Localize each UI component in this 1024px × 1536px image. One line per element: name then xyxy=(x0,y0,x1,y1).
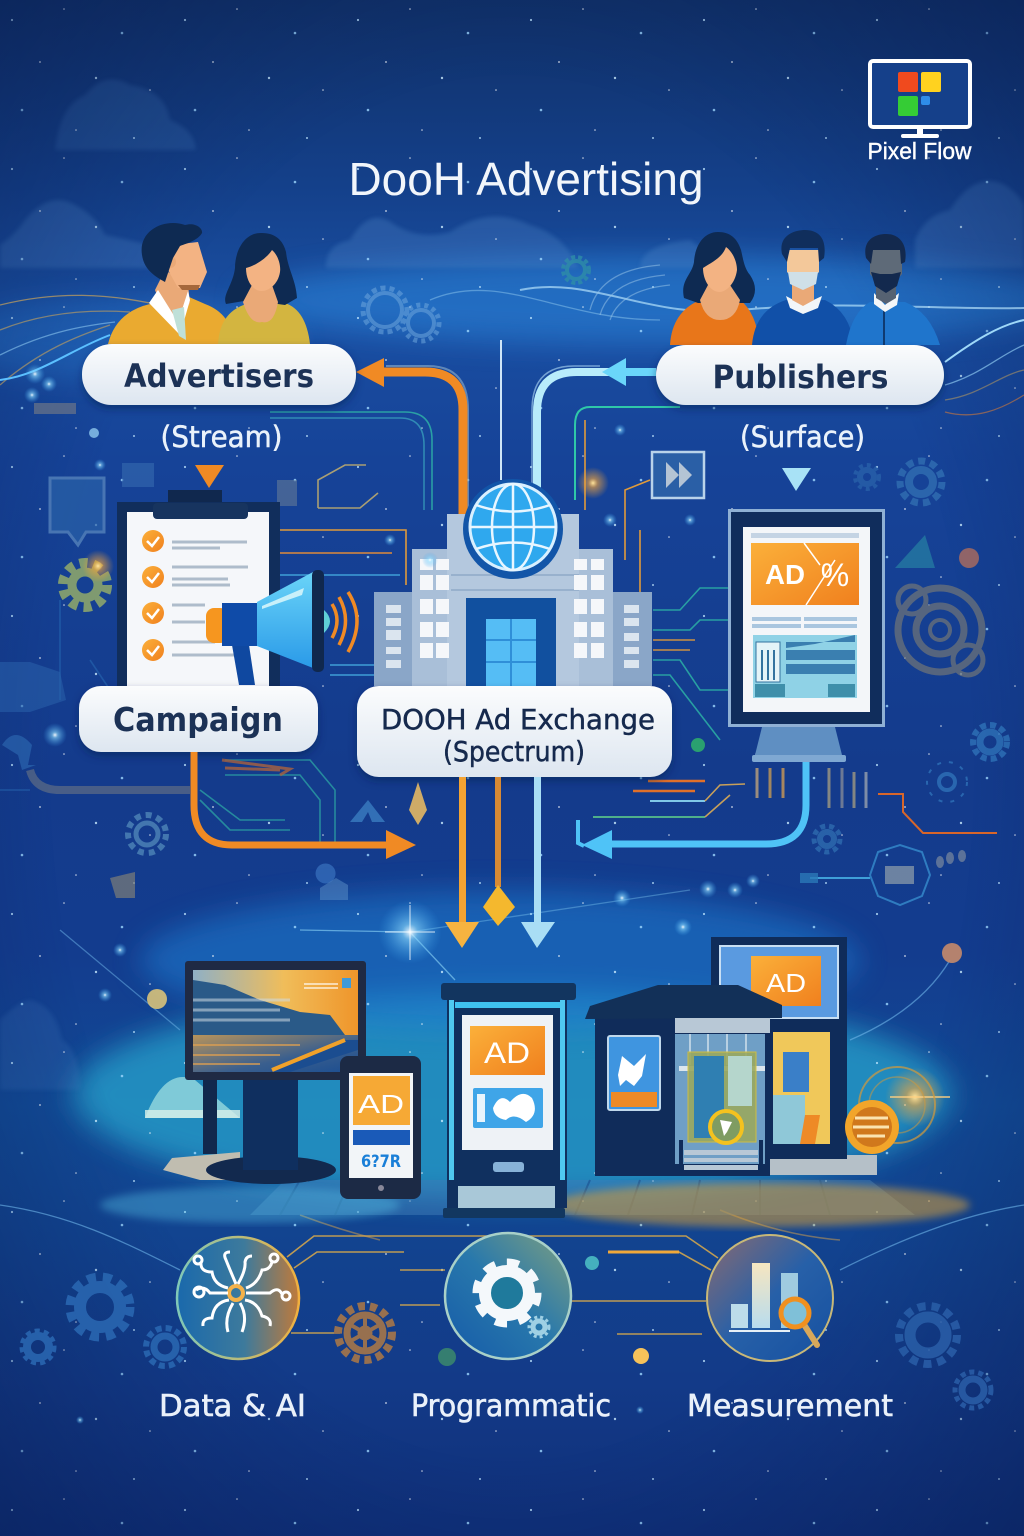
panel: data and AI xyxy=(159,1237,306,1424)
people: publishers xyxy=(670,230,940,345)
publisher display monitor xyxy=(728,509,885,762)
faded icons xyxy=(0,403,979,1118)
pill: publishers: Publishers xyxy=(712,358,888,396)
panel: measurement xyxy=(687,1235,893,1424)
pill: DOOH ad exchange xyxy=(357,686,672,777)
label: stream: (Stream) xyxy=(160,420,282,454)
title: DooH Advertising xyxy=(348,153,704,205)
star glow xyxy=(378,900,442,964)
building xyxy=(374,514,652,688)
people: advertisers xyxy=(108,223,310,344)
screen: phone: AD xyxy=(358,1089,404,1119)
pill: advertisers xyxy=(82,344,356,405)
panel: programmatic xyxy=(411,1233,611,1424)
pill: publishers xyxy=(656,345,944,405)
pill: DOOH ad exchange: (Spectrum) xyxy=(443,735,585,768)
publisher display monitor: % xyxy=(821,557,849,593)
label: surface: (Surface) xyxy=(740,420,865,454)
pill: advertisers: Advertisers xyxy=(124,357,314,395)
screen: storefront: AD xyxy=(766,968,806,998)
screen: kiosk xyxy=(441,983,576,1218)
screen: phone xyxy=(340,1056,421,1199)
faded gear decorations xyxy=(22,257,1007,1408)
clipboard xyxy=(117,490,280,692)
circuit lines xyxy=(0,407,997,1334)
arrow: surface to exchange xyxy=(578,762,806,859)
logo: Pixel Flow: Pixel Flow xyxy=(868,138,972,164)
arrow: campaign to exchange xyxy=(194,752,416,859)
ground glow xyxy=(100,1180,970,1227)
panel: measurement: Measurement xyxy=(687,1389,893,1424)
arrow: exchange down gold diamond xyxy=(483,777,515,926)
pill: campaign: Campaign xyxy=(113,700,283,739)
glowing nodes xyxy=(24,364,962,1424)
arrow: exchange down light blue xyxy=(521,777,555,948)
publisher display monitor: AD xyxy=(765,559,805,590)
arrow: surface down xyxy=(782,468,811,491)
pill: campaign xyxy=(79,686,318,752)
arrow: exchange down orange xyxy=(445,777,479,948)
panel: data and AI: Data & AI xyxy=(159,1389,306,1424)
screen: phone: 6?7R xyxy=(361,1152,401,1172)
pill: DOOH ad exchange: DOOH Ad Exchange xyxy=(381,703,655,736)
screen: storefront xyxy=(585,937,877,1176)
small flame marker xyxy=(409,782,427,825)
screen: billboard xyxy=(163,961,366,1184)
logo: Pixel Flow xyxy=(868,61,972,164)
arrow: publishers to exchange xyxy=(532,358,656,490)
screen: kiosk: AD xyxy=(484,1037,530,1070)
arrow: exchange to advertisers xyxy=(356,340,501,515)
arrow: stream down xyxy=(195,465,224,488)
panel: programmatic: Programmatic xyxy=(411,1389,611,1424)
globe xyxy=(463,479,563,579)
icon: coin xyxy=(845,1067,935,1154)
megaphone xyxy=(206,570,357,685)
